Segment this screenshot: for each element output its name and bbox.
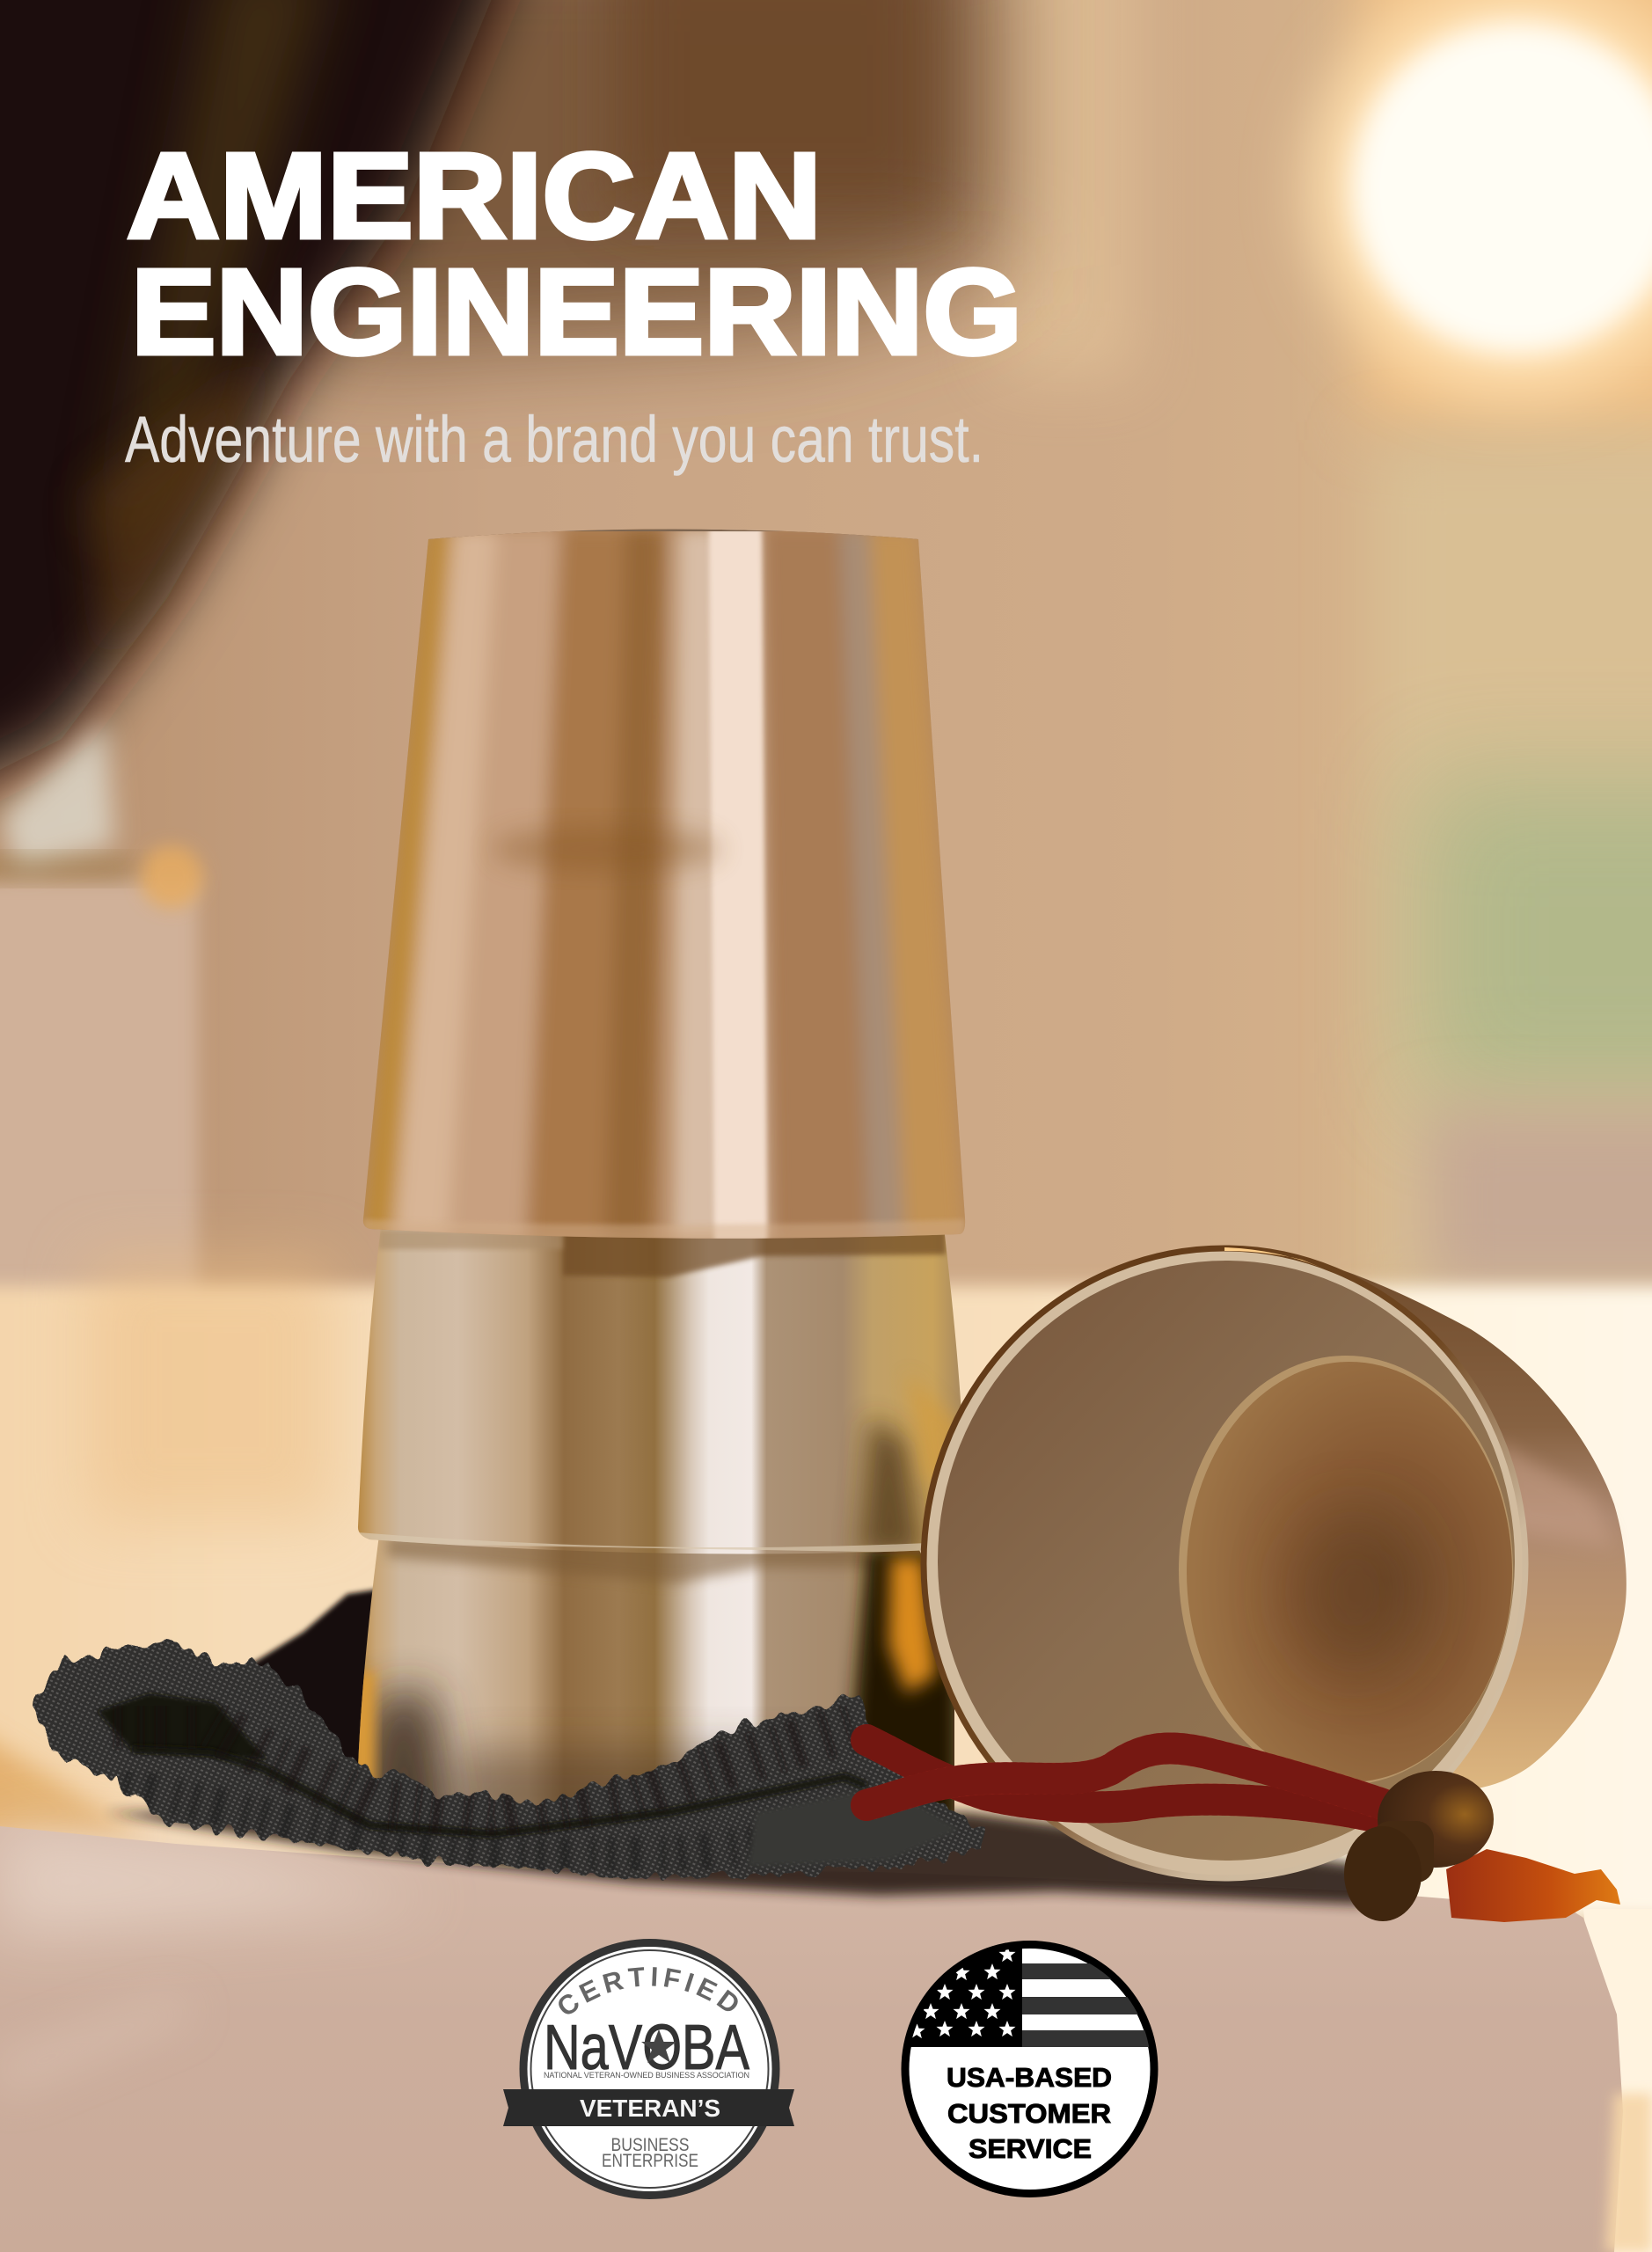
marble tabletop bbox=[0, 1826, 1652, 2252]
badge: NaVOBA certified: ENTERPRISE bbox=[602, 2151, 698, 2171]
drawstring bag: front gathered band bbox=[33, 1639, 985, 1881]
headline: AMERICAN bbox=[127, 128, 822, 264]
badge: NaVOBA certified: VETERAN’S bbox=[580, 2095, 720, 2122]
cast shadow under bag and cup bbox=[106, 1812, 1363, 1905]
badge: NaVOBA certified bbox=[503, 1939, 794, 2199]
red drawcord bbox=[866, 1740, 1385, 1819]
headline bbox=[127, 128, 1022, 380]
stacked cup: middle bbox=[352, 1223, 968, 1557]
badge: USA-based customer service: SERVICE bbox=[969, 2133, 1092, 2164]
rolled cup on its side bbox=[924, 1247, 1626, 1878]
cord toggle and frayed tail bbox=[1344, 1771, 1620, 1922]
stacked cup: top bbox=[352, 519, 976, 1249]
stacked cup: bottom bbox=[358, 1539, 954, 1811]
bag: rear fabric bbox=[251, 1588, 387, 1812]
badge: USA-based customer service: CUSTOMER bbox=[947, 2098, 1111, 2129]
headline: ENGINEERING bbox=[131, 245, 1022, 380]
table surface bbox=[0, 1258, 1652, 1919]
badge: USA-based customer service: USA-BASED bbox=[947, 2062, 1112, 2093]
badge: NaVOBA certified: NATIONAL VETERAN-OWNED BUSINESS ASSOCIATION bbox=[544, 2071, 749, 2080]
badge: NaVOBA certified: CERTIFIED bbox=[559, 1967, 738, 2014]
badge: USA-based customer service bbox=[897, 1935, 1163, 2197]
badge: NaVOBA certified: NaVOBA bbox=[544, 2013, 749, 2083]
sun glare bbox=[1311, 0, 1652, 395]
tagline: Adventure with a brand you can trust. bbox=[125, 403, 983, 476]
badge: NaVOBA certified: BUSINESS bbox=[610, 2135, 690, 2155]
